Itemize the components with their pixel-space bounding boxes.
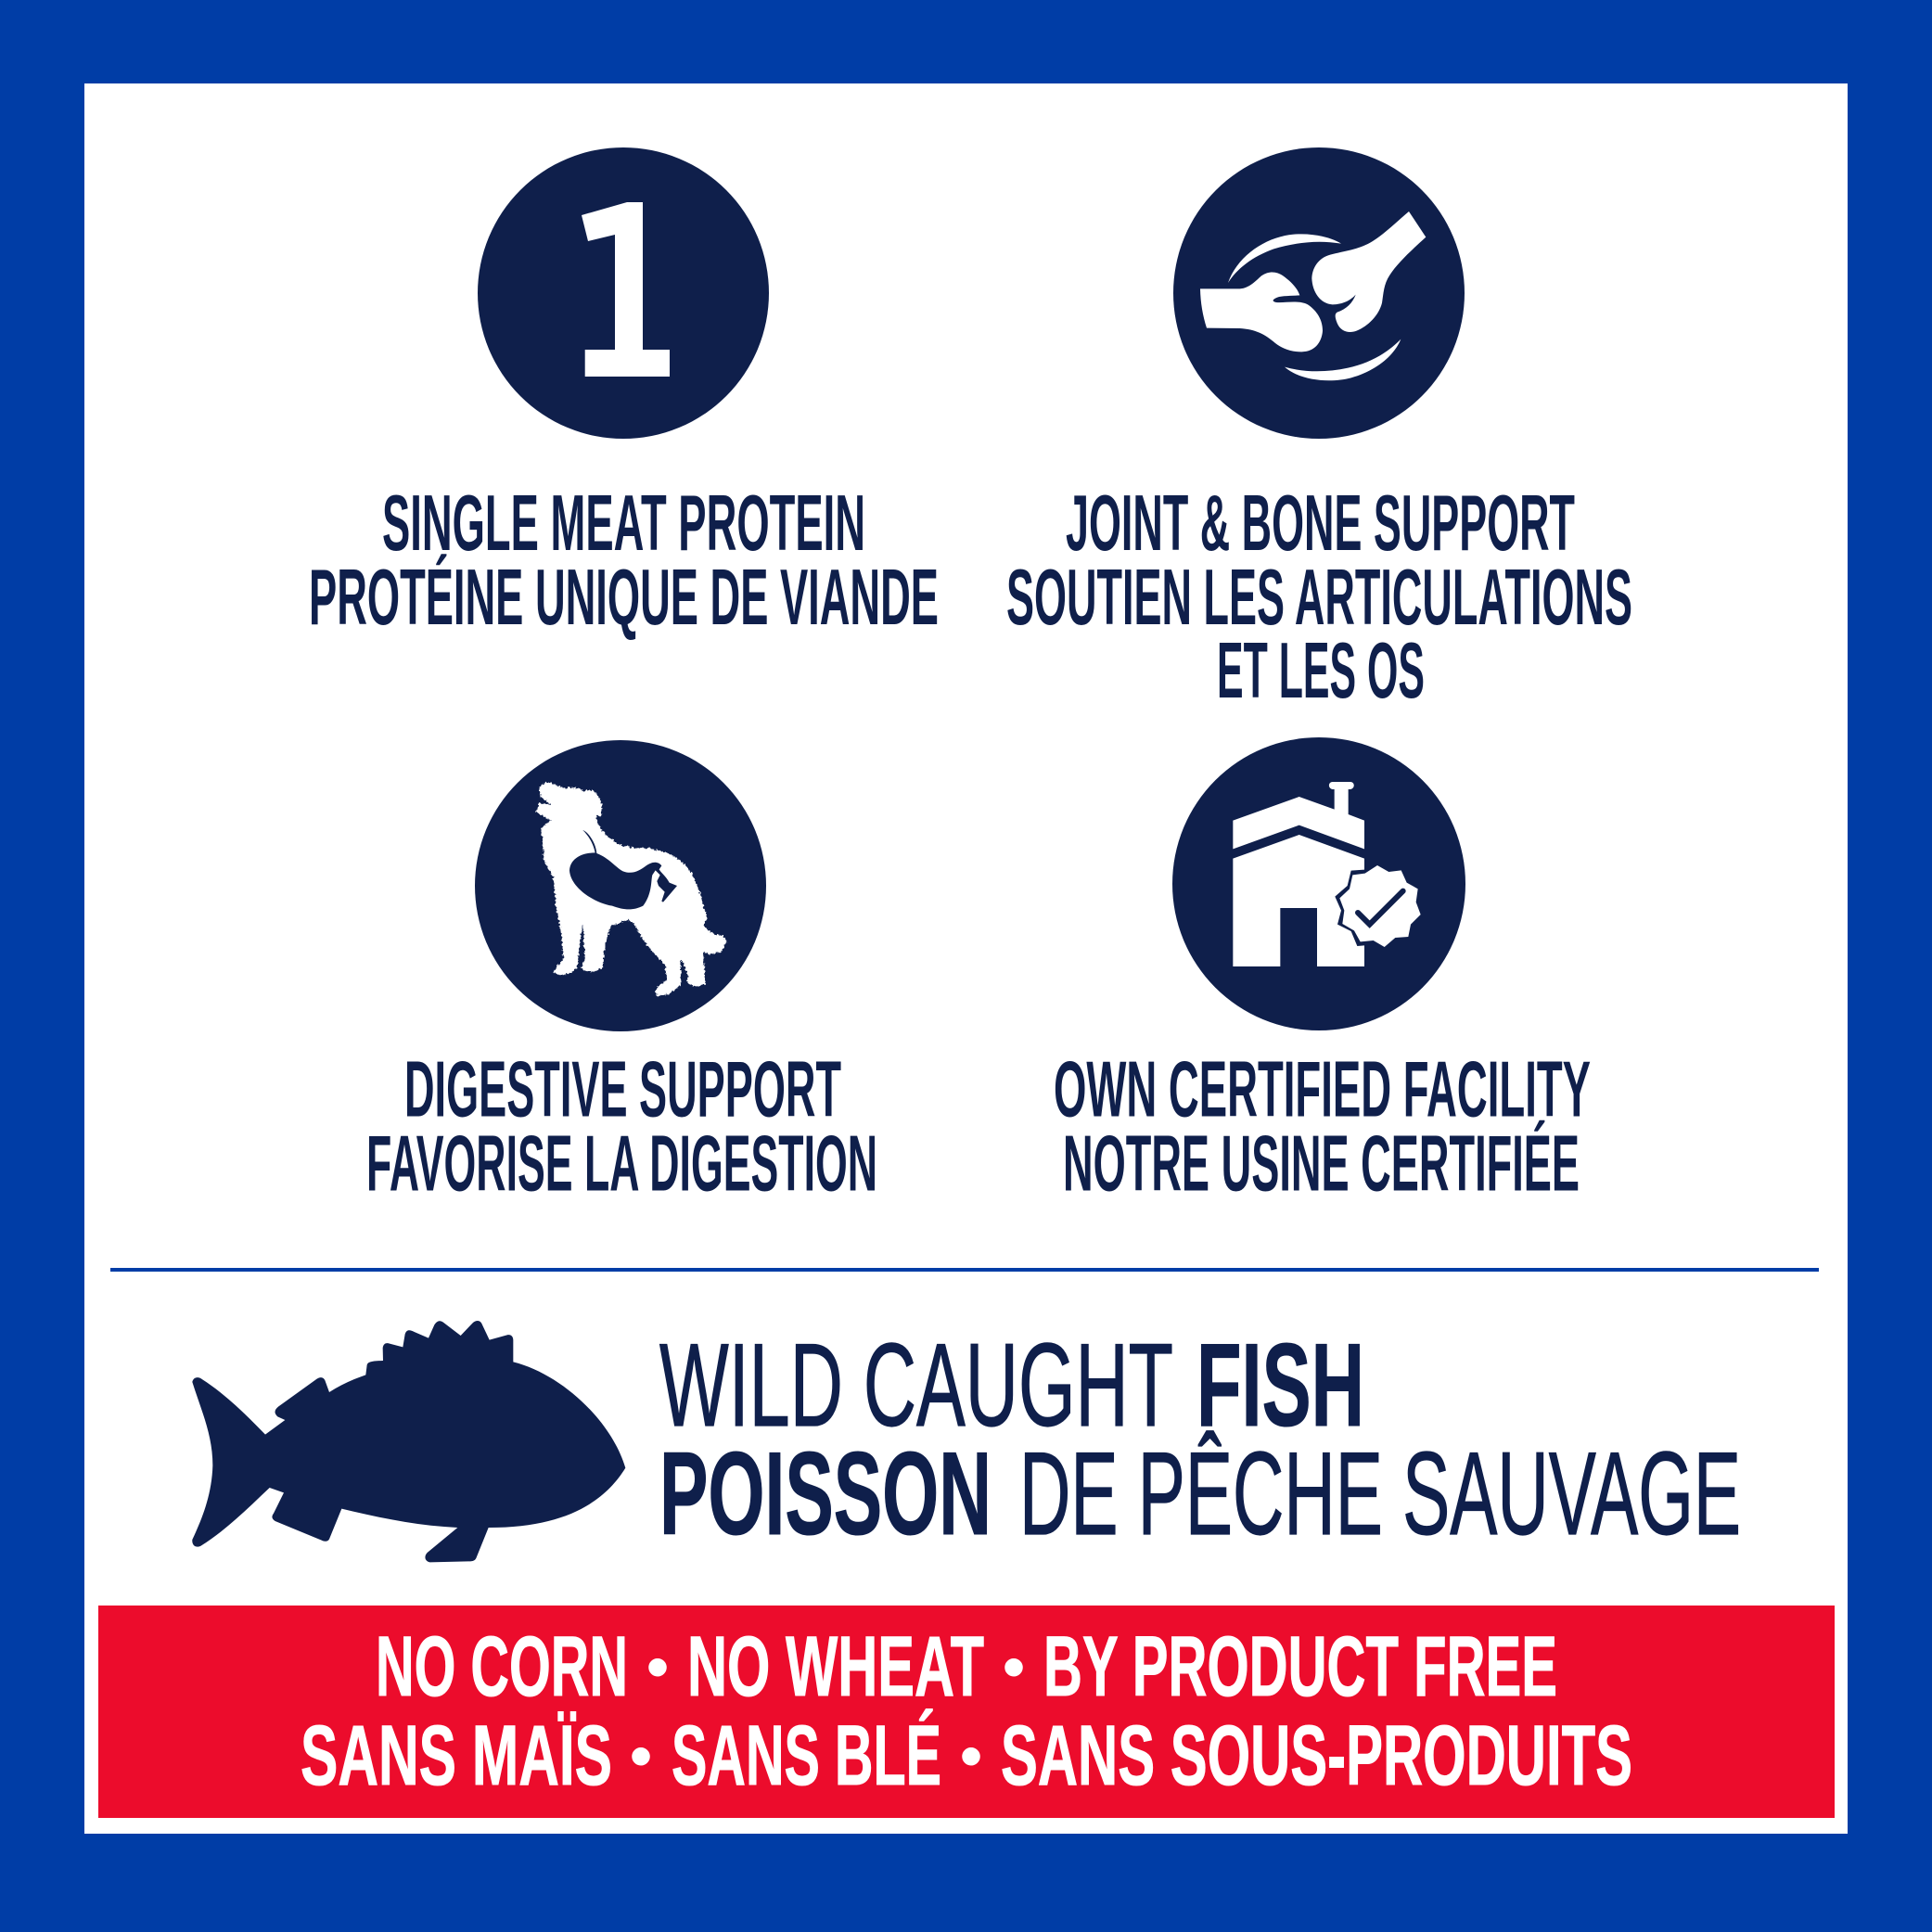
- label: single meat protein: SINGLE MEAT PROTEIN: [382, 480, 865, 568]
- label: single meat protein: PROTÉINE UNIQUE DE VIANDE: [309, 554, 939, 642]
- label: single meat protein: [309, 480, 939, 642]
- banner: free-from claims: •: [960, 1721, 982, 1791]
- icon: fish silhouette: [192, 1321, 625, 1562]
- heading: wild caught fish: FISH: [1196, 1319, 1364, 1451]
- label: digestive support: FAVORISE LA DIGESTION: [366, 1120, 877, 1208]
- banner: free-from claims: •: [1003, 1631, 1025, 1702]
- label: joint and bone support: [1006, 480, 1632, 715]
- icon: number one badge: 1: [572, 157, 677, 456]
- heading: wild caught fish: POISSON: [659, 1427, 992, 1559]
- banner: free-from claims: NO WHEAT: [687, 1619, 984, 1714]
- panel: single meat protein: [309, 147, 939, 642]
- icon: dog with stomach: [475, 740, 766, 1031]
- panel: digestive support: [366, 740, 877, 1208]
- banner: free-from claims: SANS BLÉ: [672, 1708, 941, 1803]
- label: own certified facility: [1054, 1046, 1591, 1208]
- heading: wild caught fish: WILD CAUGHT: [659, 1319, 1173, 1451]
- banner: free-from claims: •: [646, 1631, 669, 1702]
- icon: number one badge: [478, 147, 769, 456]
- label: digestive support: DIGESTIVE SUPPORT: [404, 1046, 841, 1133]
- heading: wild caught fish: [659, 1319, 1741, 1559]
- banner: free-from claims: SANS MAÏS: [301, 1708, 612, 1803]
- icon: joint and bone: [1173, 147, 1465, 439]
- panel: joint and bone support: [1006, 147, 1632, 715]
- panel: own certified facility: [1054, 737, 1591, 1208]
- label: joint and bone support: ET LES OS: [1217, 627, 1425, 715]
- banner: free-from claims: BY PRODUCT FREE: [1043, 1619, 1557, 1714]
- label: digestive support: [366, 1046, 877, 1208]
- banner: free-from claims: NO CORN: [376, 1619, 628, 1714]
- banner: free-from claims: [98, 1606, 1835, 1818]
- banner: free-from claims: •: [630, 1721, 652, 1791]
- icon: house with certified badge: [1172, 737, 1465, 1030]
